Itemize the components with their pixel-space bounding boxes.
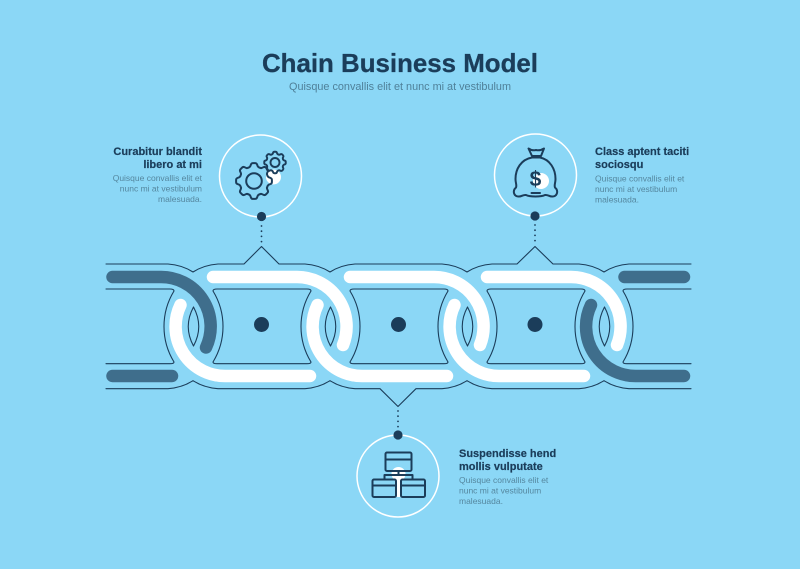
heading: libero at mi — [143, 159, 202, 171]
lens outline 3 — [462, 307, 473, 346]
callout: money bag (top right) — [494, 134, 689, 245]
icon: money bag — [514, 148, 557, 197]
heading: Curabitur blandit — [113, 146, 202, 158]
body text: Quisque convallis elit et — [113, 173, 203, 183]
center dot 1 — [254, 317, 269, 332]
left end opening outline — [106, 289, 174, 364]
heading: sociosqu — [595, 159, 643, 171]
lens outline 1 — [188, 307, 199, 346]
lens outline 2 — [325, 307, 336, 346]
center dot 3 — [528, 317, 542, 332]
chain diagram — [106, 246, 691, 406]
right end opening outline — [623, 289, 691, 364]
window outline 3 — [487, 289, 585, 364]
connector — [260, 226, 262, 245]
connector — [534, 225, 536, 245]
dark link: right top — [624, 271, 684, 283]
window outline 1 — [213, 289, 311, 364]
body text: malesuada. — [595, 194, 639, 204]
heading: Suspendisse hend — [459, 448, 556, 460]
body text: malesuada. — [158, 194, 202, 204]
connector dot — [393, 430, 403, 440]
white link 1 — [176, 277, 347, 376]
icon: money bag: $ — [530, 168, 542, 191]
callout: gears (top left) — [113, 135, 302, 245]
callout: hierarchy (bottom) — [357, 411, 556, 517]
chain outer outline: top edge with two pointers — [106, 246, 691, 272]
window outline 2 — [350, 289, 448, 364]
center dot 2 — [391, 317, 406, 332]
icon: gears — [236, 152, 286, 199]
connector dot — [257, 212, 266, 221]
dark link: left top — [112, 277, 211, 348]
white link 2 — [313, 277, 484, 376]
dark link: left bottom — [112, 370, 172, 382]
icon ring — [357, 435, 439, 517]
body text: Quisque convallis elit et — [459, 475, 549, 485]
body text: nunc mi at vestibulum — [595, 184, 677, 194]
body text: malesuada. — [459, 496, 503, 506]
icon ring — [494, 134, 576, 216]
subtitle: Quisque convallis elit et nunc mi at vestibulum — [289, 81, 511, 93]
icon ring — [220, 135, 302, 217]
connector — [397, 411, 399, 428]
dark link: right bottom — [586, 305, 684, 376]
heading: mollis vulputate — [459, 461, 543, 473]
chain outer outline: bottom edge with one pointer — [106, 381, 691, 406]
lens outline 4 — [599, 307, 610, 346]
connector dot — [530, 211, 540, 221]
body text: nunc mi at vestibulum — [459, 486, 541, 496]
heading: Class aptent taciti — [595, 146, 689, 158]
body text: Quisque convallis elit et — [595, 174, 685, 184]
body text: nunc mi at vestibulum — [120, 184, 202, 194]
title: Chain Business Model — [262, 48, 538, 78]
icon: hierarchy — [372, 452, 425, 497]
white link 3 — [450, 277, 621, 376]
